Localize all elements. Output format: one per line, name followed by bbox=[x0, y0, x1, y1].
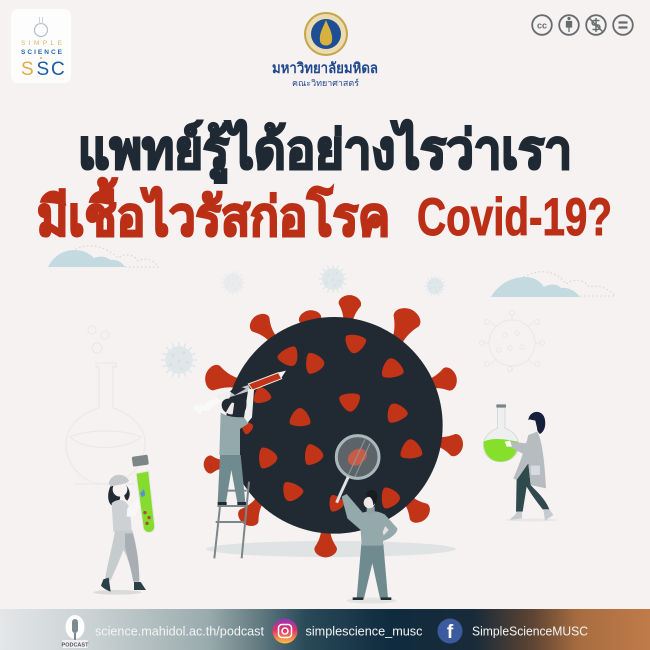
small background viruses bbox=[161, 265, 446, 378]
head bbox=[225, 402, 237, 414]
legs bbox=[357, 544, 388, 598]
logo: Simple Science SSC: SCIENCE bbox=[21, 49, 63, 56]
title: มีเชื้อไวรัสก่อโรค bbox=[37, 178, 390, 247]
head bbox=[364, 490, 377, 513]
creative commons icons: cc bbox=[537, 20, 547, 30]
podcast url: science.mahidol.ac.th/podcast bbox=[95, 624, 265, 638]
logo: Simple Science SSC: S bbox=[36, 59, 49, 80]
hair bbox=[108, 485, 130, 505]
test tube bbox=[132, 455, 155, 533]
magnifying glass bbox=[336, 436, 379, 503]
ladder worker group bbox=[194, 371, 286, 558]
magnifier worker bbox=[342, 490, 397, 604]
facebook icon: f bbox=[447, 622, 454, 643]
university name: คณะวิทยาศาสตร์ bbox=[292, 78, 359, 88]
logo: Simple Science SSC: S bbox=[21, 59, 34, 80]
title bbox=[37, 119, 612, 247]
facebook handle: SimpleScienceMUSC bbox=[472, 624, 588, 638]
ladder bbox=[214, 482, 249, 558]
arm and torso bbox=[342, 494, 397, 546]
instagram handle: simplescience_musc bbox=[306, 624, 422, 638]
logo: Simple Science SSC: SIMPLE bbox=[21, 40, 63, 47]
shoes bbox=[101, 578, 146, 592]
logo: Mahidol University seal bbox=[304, 12, 348, 56]
arm bbox=[127, 497, 143, 517]
syringe bbox=[194, 399, 219, 414]
head and cap bbox=[113, 482, 127, 497]
spikes bbox=[202, 294, 465, 557]
university name: มหาวิทยาลัยมหิดล bbox=[272, 60, 378, 77]
hair and face bbox=[528, 412, 545, 434]
inner protein blobs bbox=[240, 333, 423, 512]
creative commons icons bbox=[532, 15, 633, 35]
facebook icon bbox=[438, 618, 462, 644]
outlined virus right bbox=[480, 310, 544, 372]
legs bbox=[516, 463, 549, 512]
torso and arm bbox=[219, 413, 248, 455]
podcast icon: PODCAST bbox=[62, 642, 89, 648]
title: แพทย์รู้ได้อย่างไรว่าเรา bbox=[78, 119, 572, 183]
body bbox=[112, 500, 132, 532]
legs bbox=[218, 455, 245, 503]
hand on hip gap bbox=[383, 526, 389, 535]
university name bbox=[272, 60, 378, 88]
podcast icon bbox=[62, 615, 89, 648]
flask bbox=[483, 404, 519, 462]
logo: Simple Science SSC bbox=[11, 9, 71, 83]
main coronavirus bbox=[202, 294, 465, 557]
logo: Simple Science SSC: C bbox=[51, 59, 65, 80]
cloud left bbox=[48, 246, 158, 267]
virus body bbox=[226, 317, 443, 534]
footer bar bbox=[0, 609, 650, 650]
coat bbox=[513, 432, 546, 488]
cloud right bbox=[491, 272, 615, 297]
scientist with flask bbox=[483, 404, 558, 521]
instagram icon bbox=[272, 618, 298, 644]
faint flask background bbox=[66, 326, 145, 484]
shadow under virus bbox=[206, 541, 456, 557]
scientist with test tube bbox=[93, 455, 155, 595]
